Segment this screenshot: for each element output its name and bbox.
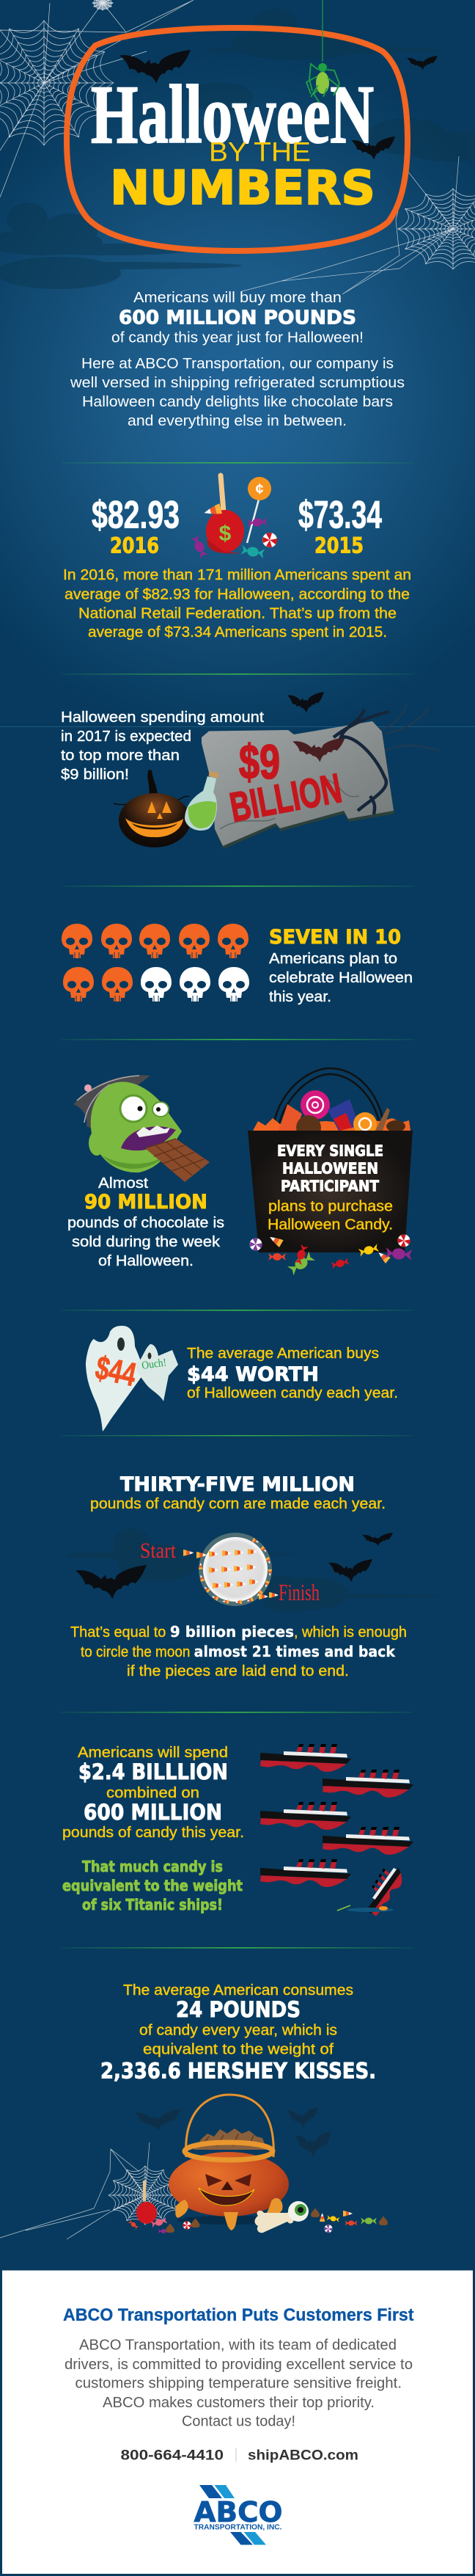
bats: moon scene <box>76 1533 393 1599</box>
text: 90 million: pounds of chocolate is <box>67 1215 224 1231</box>
pictogram: six titanic ships <box>260 1744 413 1919</box>
spider web: by the cauldron <box>0 2142 182 2239</box>
text: $44 worth <box>187 1346 398 1401</box>
contact details: shipABCO.com <box>248 2448 358 2464</box>
spider web: right <box>242 156 475 294</box>
stat: 2016 and 2015 spending <box>92 493 382 558</box>
intro text: 600 MILLION POUNDS <box>119 307 356 329</box>
heading: thirty-five million <box>90 1473 386 1512</box>
icon: potion bottle <box>185 771 219 831</box>
text: $2.4 billion: of six Titanic ships! <box>82 1896 223 1913</box>
intro text <box>70 289 405 429</box>
gravestone: $9 billion: $9 <box>239 734 280 789</box>
stat: 2016 and 2015 spending: 2015 <box>314 533 364 558</box>
intro text: of candy this year just for Halloween! <box>111 329 364 346</box>
panel heading: ABCO Transportation Puts Customers First <box>63 2305 414 2325</box>
text: $2.4 billion: Americans will spend <box>78 1745 228 1761</box>
bats: header <box>119 50 438 160</box>
paragraph: 2016 spending: In 2016, more than 171 million Americans spent an <box>63 567 411 583</box>
labels: start and finish <box>140 1539 320 1605</box>
text: 2017 spending: $9 billion! <box>61 767 129 783</box>
text: nine billion pieces: That’s equal to 9 billion pieces, which is enough <box>70 1623 407 1641</box>
text: nine billion pieces: to circle the moon almost 21 times and back <box>81 1643 396 1660</box>
text: nine billion pieces: if the pieces are laid end to end. <box>127 1663 349 1679</box>
contact details <box>120 2448 358 2464</box>
pictogram: seven in ten skulls <box>62 924 249 1001</box>
text: $2.4 billion: That much candy is <box>82 1858 223 1875</box>
title frame <box>67 28 408 251</box>
text: $2.4 billion: equivalent to the weight <box>62 1877 243 1894</box>
logo: ABCO Transportation: TRANSPORTATION, INC. <box>194 2523 282 2532</box>
text: nine billion pieces <box>70 1623 407 1679</box>
text: 90 million: 90 MILLION <box>84 1191 207 1214</box>
text: $44 worth: $44 WORTH <box>187 1363 319 1386</box>
icon: candy bag with text: HALLOWEEN <box>282 1160 378 1178</box>
text: $2.4 billion: $2.4 BILLLION <box>78 1759 228 1784</box>
paragraph: 2016 spending: average of $82.93 for Halloween, according to the <box>65 586 410 602</box>
clouds: moon scene <box>66 1528 440 1612</box>
icon: small candy apple <box>136 2181 157 2224</box>
panel body text: Contact us today! <box>182 2413 295 2430</box>
text: 2017 spending <box>61 709 264 783</box>
icon: candy bag with text: EVERY SINGLE <box>277 1142 383 1160</box>
spider web: top left <box>0 0 194 197</box>
paragraph: 2016 spending: National Retail Federation. That’s up from the <box>78 605 397 621</box>
text: 2017 spending: in 2017 is expected <box>61 729 191 745</box>
icon: candy apple and sweets: ¢ <box>255 481 264 497</box>
icon: moon circled by candy corn <box>183 1533 279 1606</box>
heading: thirty-five million: THIRTY-FIVE MILLION <box>120 1473 355 1496</box>
gravestone: $9 billion: BILLION <box>227 765 345 831</box>
icon: candy bag with text: PARTICIPANT <box>281 1178 379 1195</box>
paragraph: 2016 spending <box>63 567 411 641</box>
text: seven in ten: this year. <box>269 989 331 1005</box>
icon: candy bag with text: Halloween Candy. <box>268 1217 393 1233</box>
icon: candy bag with text <box>248 1068 413 1252</box>
icon: bare tree and dark bat <box>287 692 440 752</box>
text: $2.4 billion <box>62 1745 244 1913</box>
icons: scattered candy under cauldron <box>128 2208 388 2233</box>
labels: start and finish: Start <box>140 1539 177 1563</box>
icon: spider <box>306 0 339 103</box>
icon: zombie eating chocolate <box>73 1076 210 1182</box>
icon: ghosts <box>86 1326 178 1431</box>
title <box>91 69 375 216</box>
text: seven in ten <box>269 926 413 1005</box>
paragraph: 2016 spending: average of $73.34 Americans spent in 2015. <box>88 624 387 641</box>
text: 24 pounds: 2,336.6 HERSHEY KISSES. <box>100 2059 376 2084</box>
text: 24 pounds: 24 POUNDS <box>176 1997 301 2022</box>
text: seven in ten: Americans plan to <box>269 951 397 967</box>
icons: scattered candy <box>249 1233 413 1275</box>
icon: candy apple and sweets <box>191 475 277 558</box>
text: 90 million <box>67 1175 224 1269</box>
icon: ghosts: Ouch! <box>141 1357 167 1372</box>
intro text: and everything else in between. <box>128 412 347 429</box>
text: $2.4 billion: 600 MILLION <box>84 1800 222 1825</box>
text: $2.4 billion: pounds of candy this year. <box>62 1825 244 1841</box>
icon: candy apple and sweets: $ <box>219 522 232 546</box>
stat: 2016 and 2015 spending: $73.34 <box>298 493 382 537</box>
panel: ABCO company info <box>2 2270 473 2574</box>
text: $2.4 billion: combined on <box>106 1785 199 1801</box>
panel body text: ABCO makes customers their top priority. <box>103 2394 375 2411</box>
bats: faint near cauldron <box>135 2107 331 2158</box>
intro text: Here at ABCO Transportation, our company is <box>81 355 394 372</box>
panel body text <box>65 2337 413 2430</box>
text: 90 million: Almost <box>98 1175 148 1192</box>
text: 2017 spending: Halloween spending amount <box>61 709 264 726</box>
text: 24 pounds <box>100 1982 376 2084</box>
heading: thirty-five million: pounds of candy corn are made each year. <box>90 1496 386 1512</box>
intro text: well versed in shipping refrigerated scrumptious <box>70 374 405 391</box>
text: 90 million: sold during the week <box>72 1234 221 1250</box>
panel body text: drivers, is committed to providing excellent service to <box>65 2356 413 2373</box>
title: HalloweeN <box>91 69 374 161</box>
text: 24 pounds: equivalent to the weight of <box>143 2041 334 2057</box>
stat: 2016 and 2015 spending: $82.93 <box>92 493 180 537</box>
title: NUMBERS <box>110 161 375 216</box>
panel body text: ABCO Transportation, with its team of dedicated <box>79 2337 397 2354</box>
logo: ABCO Transportation <box>194 2485 283 2544</box>
panel body text: customers shipping temperature sensitive freight. <box>75 2375 402 2392</box>
logo: ABCO Transportation: ABCO <box>194 2496 283 2528</box>
text: 24 pounds: of candy every year, which is <box>139 2023 337 2039</box>
gravestone: $9 billion <box>202 709 394 849</box>
labels: start and finish: Finish <box>279 1579 320 1605</box>
text: seven in ten: celebrate Halloween <box>269 970 413 986</box>
text: 90 million: of Halloween. <box>98 1253 194 1269</box>
contact details: 800-664-4410 <box>120 2448 224 2464</box>
text: seven in ten: SEVEN IN 10 <box>269 926 401 949</box>
intro text: Americans will buy more than <box>133 289 342 306</box>
text: $44 worth: of Halloween candy each year. <box>187 1385 398 1401</box>
text: $44 worth: The average American buys <box>187 1346 379 1362</box>
icon: jack-o-lantern <box>114 770 191 847</box>
icon: ghosts: $44 <box>92 1349 139 1393</box>
icon: candy bag with text: plans to purchase <box>268 1199 393 1215</box>
text: 2017 spending: to top more than <box>61 748 180 764</box>
stat: 2016 and 2015 spending: 2016 <box>110 533 159 558</box>
title: BY THE <box>209 136 311 167</box>
icon: pumpkin cauldron <box>169 2095 289 2230</box>
text: 24 pounds: The average American consumes <box>123 1982 353 1999</box>
clouds: header <box>0 9 475 289</box>
intro text: Halloween candy delights like chocolate bars <box>82 393 393 410</box>
icon: bone and eyeball <box>254 2201 309 2233</box>
